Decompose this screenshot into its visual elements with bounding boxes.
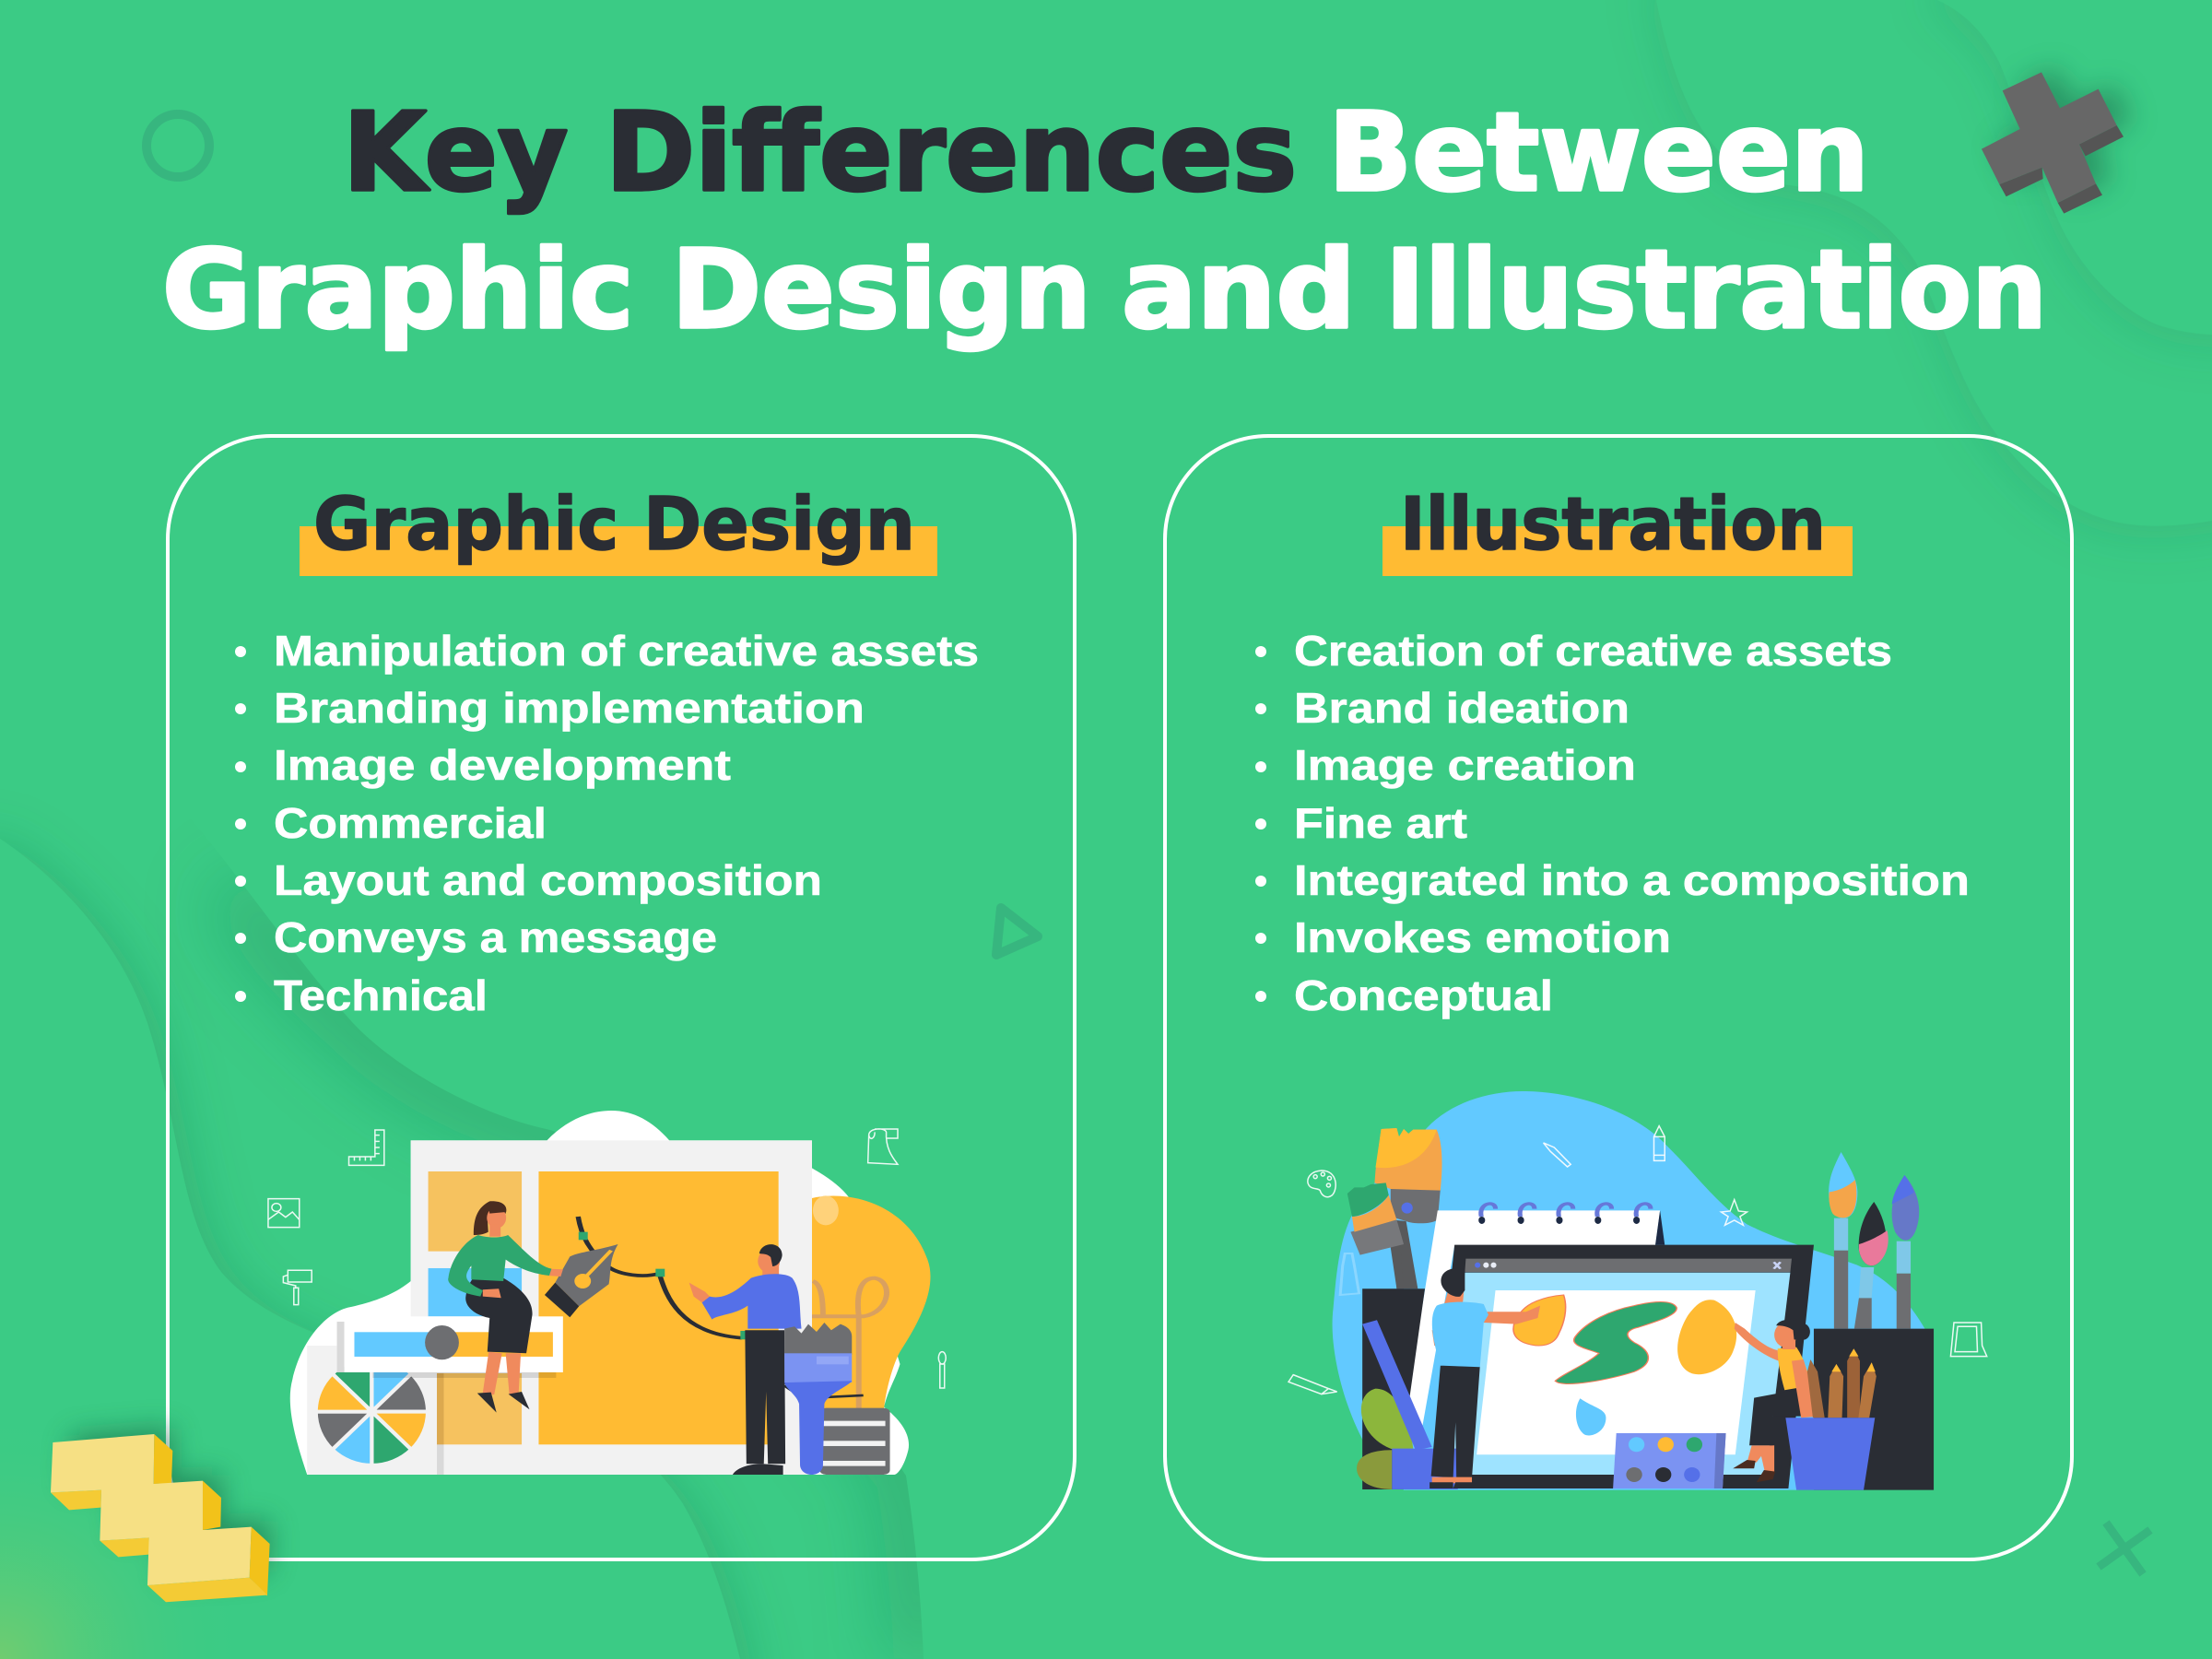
- large orange brush: [1374, 1128, 1442, 1288]
- woman sitting: [448, 1201, 563, 1413]
- heading: illustration: Illustration: [1400, 482, 1826, 567]
- list: illustration traits: Brand ideation: [1294, 684, 1630, 732]
- title: Graphic Design: [162, 226, 1091, 353]
- panel: graphic design: [168, 436, 1075, 1559]
- title: Between: [1328, 88, 1869, 216]
- icon: image: [268, 1199, 300, 1228]
- 3D yellow zigzag block: [51, 1428, 270, 1602]
- list: graphic design traits: [235, 627, 979, 1019]
- list: illustration traits: Fine art: [1294, 799, 1467, 847]
- list: graphic design traits: Branding implementation: [274, 684, 865, 732]
- tall brushes: [1829, 1152, 1919, 1329]
- title: Key Differences: [343, 88, 1297, 216]
- small green brush: [1347, 1182, 1404, 1288]
- illustration: illustration scene: [1288, 1091, 1987, 1490]
- list: graphic design traits: Commercial: [274, 799, 547, 847]
- painted shapes on canvas: [1513, 1295, 1736, 1435]
- decorative ring: [147, 114, 209, 177]
- list: graphic design traits: Layout and composition: [274, 856, 822, 904]
- man standing: [689, 1244, 802, 1475]
- icon: brush: [1544, 1143, 1571, 1167]
- panel: illustration: [1165, 436, 2072, 1559]
- artboard: [307, 1140, 812, 1475]
- list: illustration traits: Image creation: [1294, 741, 1636, 789]
- plants and ruler: [1357, 1320, 1458, 1489]
- icon: small brush: [938, 1352, 946, 1388]
- icon: crayon: [1288, 1375, 1337, 1394]
- pencils in cup: [1807, 1348, 1877, 1418]
- list: illustration traits: Creation of creative assets: [1294, 627, 1892, 675]
- faint bottle: [1340, 1253, 1359, 1295]
- list: illustration traits: Invokes emotion: [1294, 913, 1671, 961]
- blue blob: [1333, 1091, 1930, 1490]
- 3D grey cross: [1982, 67, 2132, 214]
- woman at canvas: [1733, 1320, 1820, 1482]
- list: illustration traits: Conceptual: [1294, 971, 1553, 1019]
- base stack: [819, 1408, 890, 1475]
- icon: scroll: [868, 1129, 898, 1164]
- title: [162, 88, 2047, 353]
- decorative triangle: [996, 908, 1038, 955]
- list: graphic design traits: Conveys a message: [274, 913, 717, 961]
- palette: [1613, 1433, 1726, 1488]
- icon: ruler: [349, 1130, 384, 1165]
- title: Illustration: [1385, 226, 2047, 353]
- bezier curve with nodes: [578, 1217, 747, 1339]
- icon: pencil: [1653, 1126, 1665, 1160]
- heading highlight: [300, 526, 937, 576]
- left dark block: [1362, 1288, 1425, 1489]
- paint brush: [784, 1323, 864, 1475]
- illustration: graphic design scene: [268, 1111, 946, 1475]
- light bulb: [812, 1195, 931, 1408]
- icon: star: [1721, 1200, 1747, 1225]
- list: graphic design traits: Manipulation of creative assets: [274, 627, 979, 675]
- monitor: [1430, 1245, 1814, 1488]
- icon: palette: [1308, 1171, 1335, 1197]
- decorative x: [2099, 1523, 2150, 1574]
- right dark block: [1814, 1329, 1934, 1490]
- notepad: [1404, 1204, 1665, 1426]
- pen nib: [545, 1244, 618, 1317]
- title: and: [1122, 226, 1356, 353]
- list: illustration traits: [1255, 627, 1970, 1019]
- list: illustration traits: Integrated into a composition: [1294, 856, 1970, 904]
- heading highlight: [1382, 526, 1853, 576]
- icon: paint roller: [283, 1270, 312, 1305]
- heading: graphic design: Graphic Design: [313, 482, 915, 567]
- blue cup: [1785, 1418, 1875, 1490]
- colour wheel: [316, 1358, 428, 1465]
- list: graphic design traits: Image development: [274, 741, 731, 789]
- list: graphic design traits: Technical: [274, 971, 488, 1019]
- icon: frame: [1950, 1323, 1987, 1357]
- slider box: [337, 1316, 563, 1378]
- man at canvas: [1430, 1268, 1540, 1488]
